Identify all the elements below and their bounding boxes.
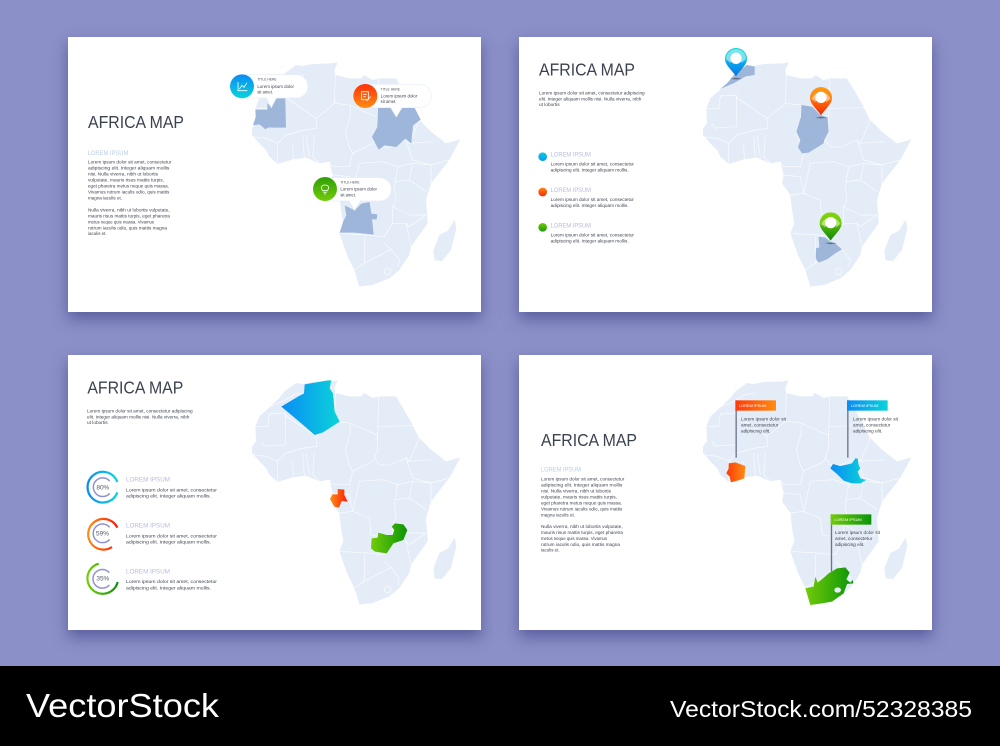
text block: Nulla viverra, nibh ut lobortis vulputate, (88, 207, 170, 213)
ring stat: 59%: adipiscing elit. Integer aliquam mollis. (126, 540, 211, 546)
legend item: red: LOREM IPSUM (550, 187, 590, 194)
callout: Angola: sit amet. (340, 192, 356, 198)
legend item: blue (538, 152, 634, 174)
flag: green: LOREM IPSUM (834, 517, 861, 522)
Africa map (702, 62, 911, 287)
text block: Vivamus rutrum iaculis odio, quis mattis (540, 507, 622, 513)
footer image id: VectorStock.com/52328385 (670, 696, 972, 722)
callout: Sudan: sit amet. (381, 99, 396, 105)
callout: Sudan (353, 84, 431, 117)
flag: blue: adipiscing elit. (852, 428, 882, 434)
Africa map (252, 62, 460, 287)
text block: metus neque quis massa. Vivamus (540, 536, 607, 542)
flag: orange: adipiscing elit. (740, 428, 770, 434)
text block: metus neque quis massa. Vivamus (88, 219, 155, 225)
flag: orange: amet, consectetur (740, 422, 778, 428)
flag: blue (846, 400, 898, 458)
text block: rutrum iaculis odio, quis mattis magna (540, 542, 620, 548)
callout: Sudan: TITLE HERE (381, 87, 401, 91)
country: South Sudan (830, 458, 866, 483)
footer logo: VectorStock (26, 687, 220, 724)
icon: green pin (819, 212, 841, 244)
text block: vulputate, mauris risus mattis turpis, (540, 495, 616, 501)
flag: green: adipiscing elit. (834, 542, 864, 548)
intro text: Lorem ipsum dolor sit amet, consectetur adipiscing (538, 90, 644, 96)
panel: pin markers map (518, 37, 932, 312)
panel: percentage rings map (68, 355, 481, 630)
flag: green: Lorem ipsum dolor sit (834, 530, 880, 536)
ring stat: 80% (88, 472, 217, 502)
text block: Nulla viverra, nibh ut lobortis vulputate, (540, 524, 622, 530)
legend item: blue: Lorem ipsum dolor sit amet, consectetur (550, 162, 634, 168)
text block: Lorem ipsum dolor sit amet, consectetur (540, 477, 624, 483)
text block: Vivamus rutrum iaculis odio, quis mattis (88, 190, 170, 196)
ring stat: 80%: LOREM IPSUM (126, 477, 170, 484)
text block: iaculis et. (540, 548, 559, 554)
country: Mauritania (253, 98, 286, 129)
text block: nisi. Nulla viverra, nibh ut lobortis (88, 172, 159, 178)
title: AFRICA MAP (88, 112, 184, 132)
callout: Mauritania: TITLE HERE (257, 78, 277, 82)
country: Ivory Coast (726, 462, 745, 482)
callout: Mauritania: sit amet. (257, 90, 273, 96)
flag: blue: Lorem ipsum dolor sit (852, 416, 898, 422)
legend item: red: adipiscing elit. Integer aliquam mollis. (550, 203, 628, 209)
ring stat: 80%: 80% (96, 484, 109, 491)
text block: mauris risus mattis turpis, eget pharetra (88, 213, 170, 219)
intro text: Lorem ipsum dolor sit amet, consectetur adipiscing (87, 408, 193, 414)
callout: Angola (313, 177, 391, 210)
legend item: green: Lorem ipsum dolor sit amet, consectetur (550, 232, 634, 238)
ring stat: 35%: LOREM IPSUM (126, 568, 170, 575)
legend item: green (538, 222, 634, 244)
country: Sudan (372, 108, 421, 150)
text block: adipiscing elit. Integer aliquam mollis (88, 166, 170, 172)
ring stat: 59%: LOREM IPSUM (126, 523, 170, 530)
text block: eget pharetra metus neque quis massa. (540, 501, 622, 507)
panel: flags map (518, 355, 932, 630)
intro text: ut lobortis (538, 102, 560, 108)
ring stat: 35%: adipiscing elit. Integer aliquam mollis. (126, 585, 211, 591)
country: Chad (796, 105, 828, 153)
flag: orange: LOREM IPSUM (738, 403, 766, 408)
icon: orange pin (810, 87, 832, 119)
footer band (0, 666, 1000, 746)
flag: blue: amet, consectetur (852, 422, 890, 428)
panel: callout bubbles map (68, 37, 481, 312)
country: Morocco (720, 65, 754, 89)
legend item: green: adipiscing elit. Integer aliquam mollis. (550, 238, 628, 244)
country: South Africa (805, 567, 852, 605)
callout: Angola: TITLE HERE (340, 181, 360, 185)
intro text: elit. Integer aliquam mollis nisi. Nulla viverra, nibh (538, 96, 641, 102)
ring stat: 80%: Lorem ipsum dolor sit amet, consectetur (126, 487, 217, 493)
ring stat: 35%: Lorem ipsum dolor sit amet, consectetur (126, 579, 217, 585)
country: Angola (340, 202, 377, 235)
intro text: ut lobortis (87, 420, 108, 426)
text block: magna iaculis et. (540, 513, 574, 519)
text block: mauris risus mattis turpis, eget pharetra (540, 530, 623, 536)
legend item: blue: LOREM IPSUM (550, 152, 590, 159)
flag: orange (735, 400, 786, 458)
country: Algeria (281, 380, 340, 435)
text block: Lorem ipsum dolor sit amet, consectetur (88, 160, 172, 166)
legend item: blue: adipiscing elit. Integer aliquam mollis. (550, 168, 628, 174)
intro text (538, 90, 644, 108)
title: AFRICA MAP (87, 377, 183, 397)
text block: LOREM IPSUM (88, 150, 128, 157)
Africa map (702, 380, 911, 605)
legend item: green: LOREM IPSUM (550, 222, 590, 229)
ring stat: 35%: 35% (96, 576, 109, 583)
flag: green: amet, consectetur (834, 536, 872, 542)
callout: Angola: Lorem ipsum dolor (340, 187, 377, 193)
country: Gabon (330, 489, 348, 508)
text block: adipiscing elit. Integer aliquam mollis (540, 483, 622, 489)
ring stat: 59%: 59% (96, 530, 109, 537)
ring stat: 35% (87, 564, 217, 594)
flag: blue: LOREM IPSUM (850, 403, 878, 408)
intro text (87, 408, 193, 426)
text block (540, 467, 624, 554)
ring stat: 80%: adipiscing elit. Integer aliquam mollis. (126, 494, 211, 500)
text block: rutrum iaculis odio, quis mattis magna (88, 225, 167, 231)
text block: iaculis et. (88, 231, 107, 237)
callout: Sudan: Lorem ipsum dolor (381, 93, 418, 99)
ring stat: 59% (88, 519, 217, 550)
icon: blue pin (724, 48, 746, 80)
text block: LOREM IPSUM (540, 467, 580, 474)
country: Zambia (371, 523, 407, 553)
ring stat: 59%: Lorem ipsum dolor sit amet, consectetur (126, 533, 217, 539)
text block: vulputate, mauris risus mattis turpis, (88, 178, 164, 184)
title: AFRICA MAP (540, 430, 636, 450)
flag: green (830, 514, 880, 572)
callout: Mauritania: Lorem ipsum dolor (257, 84, 294, 90)
flag: orange: Lorem ipsum dolor sit (740, 416, 786, 422)
text block: magna iaculis et. (88, 196, 122, 202)
title: AFRICA MAP (538, 59, 634, 79)
Africa map (252, 380, 460, 605)
intro text: elit. Integer aliquam mollis nisi. Nulla viverra, nibh (87, 414, 190, 420)
text block (88, 150, 172, 237)
legend item: red: Lorem ipsum dolor sit amet, consectetur (550, 197, 634, 203)
text block: nisi. Nulla viverra, nibh ut lobortis (540, 489, 611, 495)
country: Botswana (815, 237, 842, 263)
callout: Mauritania (230, 74, 308, 108)
legend item: red (538, 187, 634, 209)
text block: eget pharetra metus neque quis massa. (88, 184, 169, 190)
